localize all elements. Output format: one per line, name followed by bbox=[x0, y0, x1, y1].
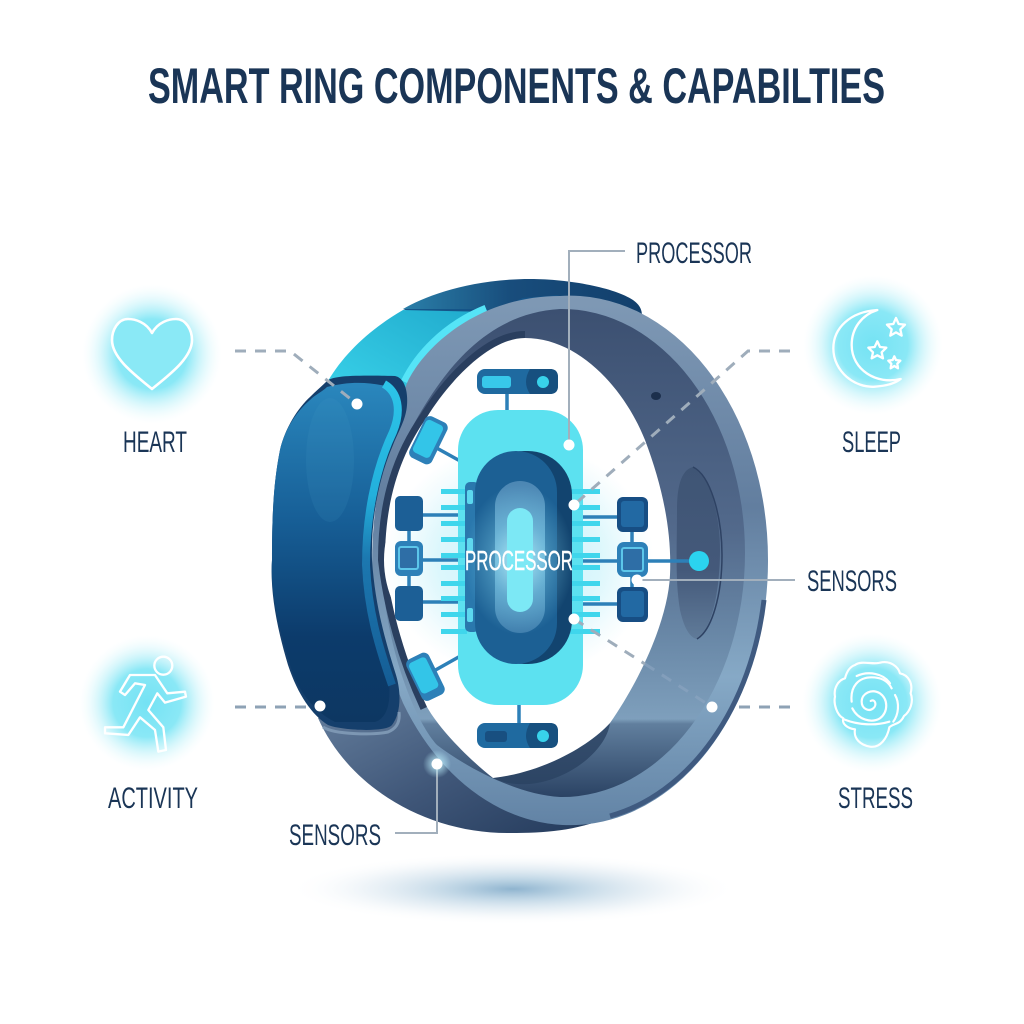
callout: sensors right leader bbox=[637, 579, 795, 581]
sleep label: SLEEP bbox=[842, 426, 901, 459]
activity icon bbox=[79, 635, 215, 771]
activity label: ACTIVITY bbox=[108, 782, 198, 815]
ring: inner surface bbox=[382, 309, 745, 797]
left nodes bbox=[395, 496, 423, 621]
floor shadow bbox=[288, 853, 738, 925]
module: upper left tilted bbox=[407, 414, 450, 466]
ring: cyan rim highlight bbox=[407, 311, 487, 383]
panel: grey bottom edge bbox=[323, 712, 399, 734]
panel: edge stripe bbox=[366, 384, 398, 685]
ring: cap accent bbox=[403, 295, 560, 318]
callout: sleep connector bbox=[574, 351, 790, 505]
ring: central opening bbox=[385, 338, 670, 778]
panel: soft highlight bbox=[306, 398, 354, 522]
stress label: STRESS bbox=[838, 782, 913, 815]
sensor dot bbox=[689, 551, 709, 571]
callout: activity connector bbox=[235, 706, 320, 708]
sleep icon bbox=[803, 275, 943, 415]
callout: stress connector right bbox=[730, 706, 790, 708]
processor center label: PROCESSOR bbox=[465, 545, 573, 576]
bottom module bbox=[477, 723, 558, 748]
callout: processor leader bbox=[569, 251, 625, 445]
stress icon bbox=[802, 633, 942, 773]
processor label: PROCESSOR bbox=[636, 237, 752, 270]
ring: pale glow in opening bbox=[384, 442, 654, 678]
ring: lower outer band bbox=[318, 680, 610, 833]
ring: dark left inner edge bbox=[385, 338, 525, 707]
callout: stress connector diagonal bbox=[574, 619, 645, 664]
module: lower left tilted bbox=[404, 651, 447, 703]
ring: cyan outer band bbox=[328, 310, 490, 402]
ring: side window bbox=[677, 467, 722, 639]
callout: heart connector bbox=[235, 351, 357, 404]
sensors label right: SENSORS bbox=[807, 565, 897, 598]
processor assembly bbox=[395, 369, 709, 748]
right nodes bbox=[617, 497, 648, 622]
ring: dark shadow under opening bbox=[493, 723, 610, 784]
processor: core bbox=[464, 451, 574, 664]
top module bbox=[477, 369, 558, 394]
ring: blue outer panel bbox=[272, 376, 407, 734]
side module lines bbox=[409, 394, 698, 723]
smart ring bbox=[272, 279, 768, 833]
processor: cyan substrate bbox=[458, 410, 583, 705]
processor: pins bbox=[441, 489, 600, 634]
ring: front rim bbox=[372, 296, 768, 825]
callout: stress connector faded bbox=[645, 664, 712, 707]
heart label: HEART bbox=[123, 426, 187, 459]
heart icon bbox=[82, 284, 222, 424]
ring: back dark cap bbox=[403, 279, 642, 316]
ring: dark lower right edge bbox=[610, 600, 764, 816]
processor: side strips bbox=[465, 482, 479, 632]
callout dots bbox=[314, 398, 718, 778]
sensors label bottom: SENSORS bbox=[289, 819, 381, 852]
ring: small hole bbox=[651, 392, 661, 400]
callout: sensors bottom leader bbox=[395, 764, 437, 833]
